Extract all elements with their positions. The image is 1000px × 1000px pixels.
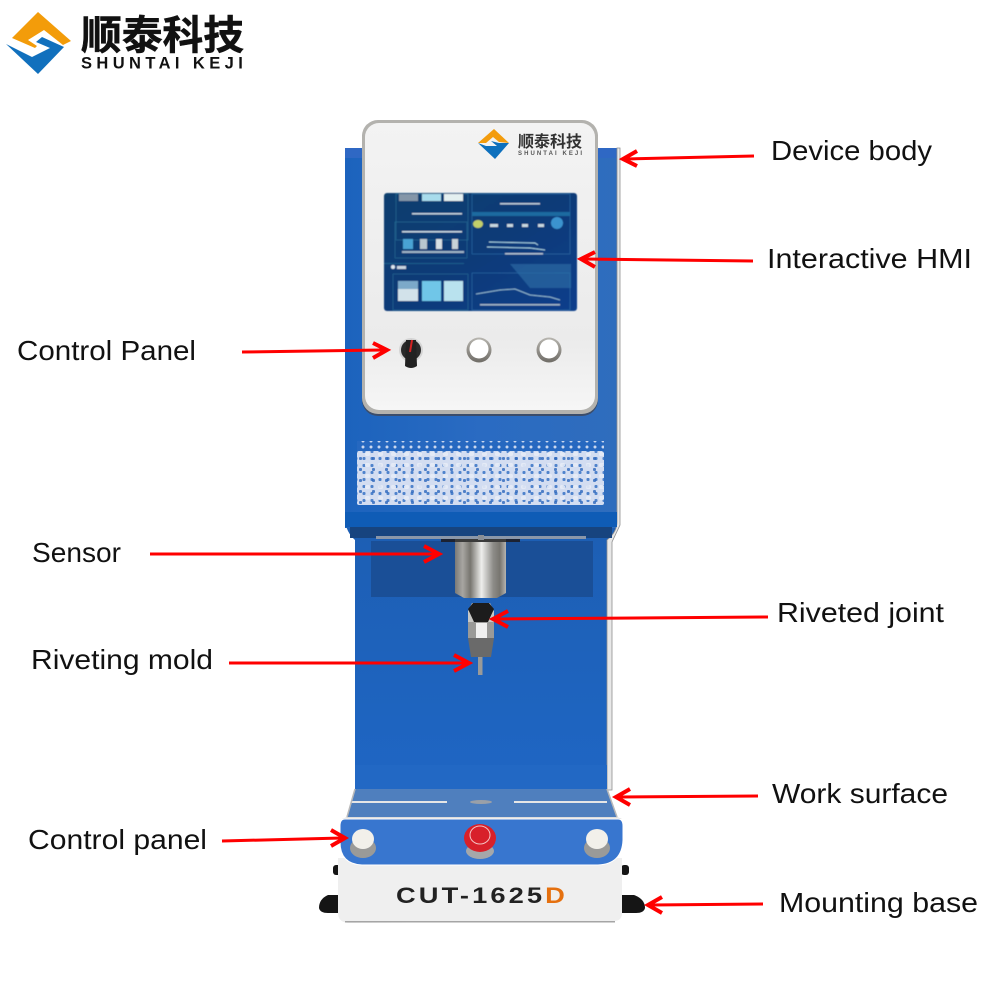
callout: Riveted joint: Riveted joint — [777, 597, 944, 628]
callout: Device body — [623, 135, 932, 166]
panel logo — [478, 129, 582, 159]
callout: Riveting mold: Riveting mold — [31, 644, 213, 675]
callout: Riveted joint — [493, 597, 944, 628]
emergency stop button — [464, 824, 496, 859]
logo: Shuntai Keji — [6, 12, 247, 74]
callout: Control panel — [28, 824, 345, 855]
callout: Interactive HMI — [581, 243, 972, 274]
touch screen: interactive HMI — [384, 193, 577, 311]
icon: logo diamond — [6, 12, 71, 74]
left button — [350, 829, 376, 858]
callout: Sensor: Sensor — [32, 537, 121, 568]
callout: Mounting base: Mounting base — [779, 887, 978, 918]
mounting base — [338, 858, 622, 923]
callout: Device body: Device body — [771, 135, 932, 166]
callout: Control Panel: Control Panel — [17, 335, 196, 366]
machine — [319, 120, 645, 923]
front control strip — [340, 819, 623, 865]
callout: Sensor — [32, 537, 439, 568]
callout: Interactive HMI: Interactive HMI — [767, 243, 972, 274]
right button — [584, 829, 610, 858]
callout: Work surface — [616, 778, 948, 809]
push button — [536, 338, 562, 362]
panel logo: 顺泰科技 — [518, 132, 582, 151]
device body column — [345, 148, 620, 790]
selector switch — [399, 338, 423, 368]
callout: Work surface: Work surface — [772, 778, 948, 809]
logo Latin name: SHUNTAI KEJI — [81, 54, 247, 72]
riveting mold tip — [478, 657, 482, 675]
callout: Control Panel — [17, 335, 387, 366]
callout: Riveting mold — [31, 644, 469, 675]
logo Chinese name: 顺泰科技 — [81, 14, 244, 58]
press spindle — [441, 535, 520, 598]
callout: Mounting base — [648, 887, 978, 918]
model label: CUT-1625 D — [396, 883, 568, 908]
vent grille — [357, 441, 604, 505]
push button — [466, 338, 492, 362]
panel logo: SHUNTAI KEJI — [518, 151, 582, 157]
work surface — [342, 789, 622, 819]
control panel housing — [362, 120, 598, 416]
callout: Control panel: Control panel — [28, 824, 207, 855]
riveted joint chuck — [468, 603, 494, 657]
mounting feet — [319, 865, 645, 913]
